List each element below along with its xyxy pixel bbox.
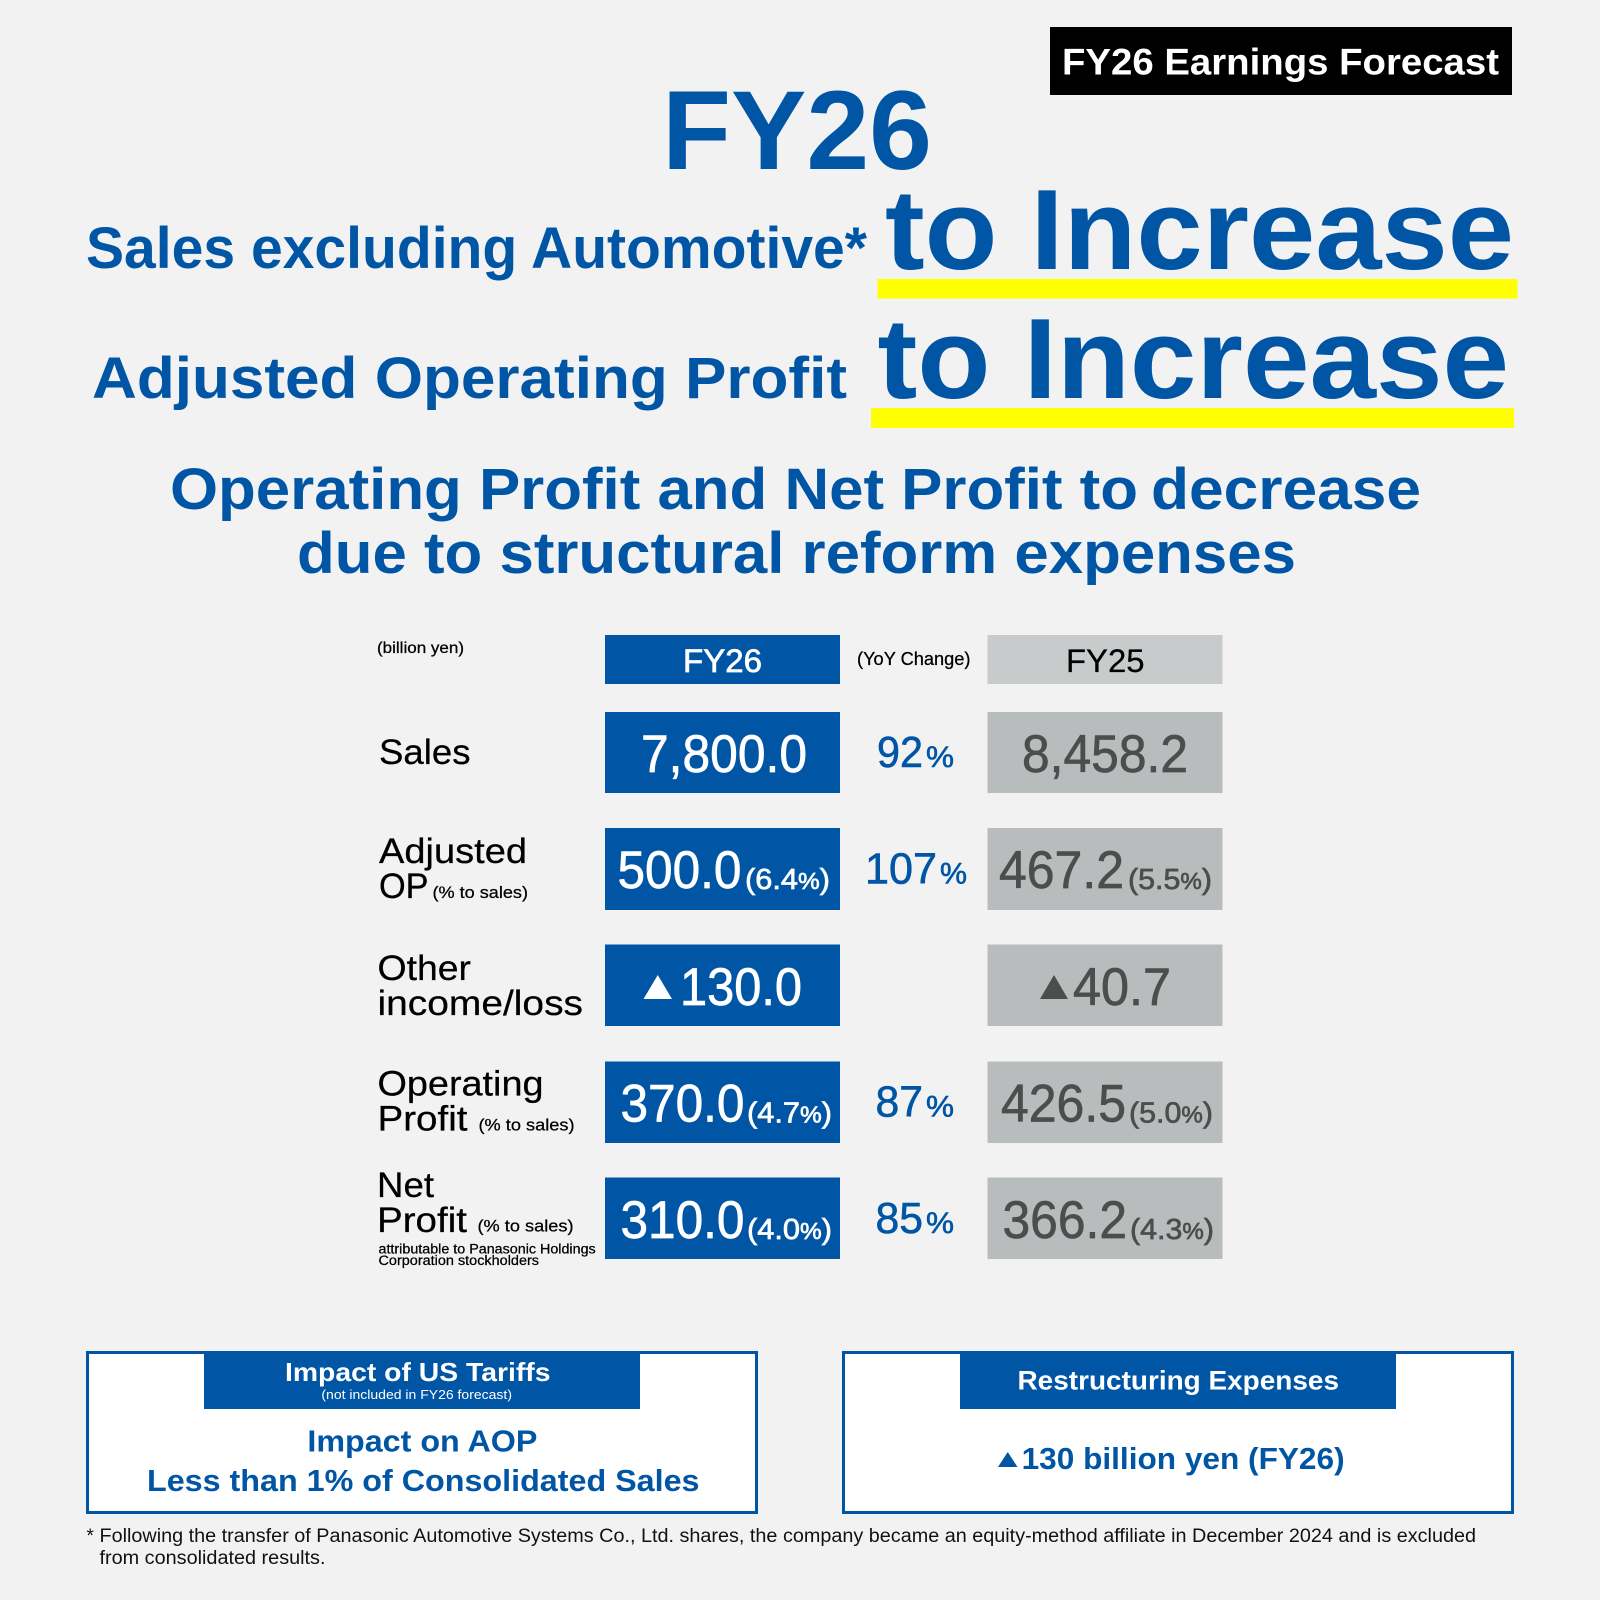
row: adjusted OP: 500.0 [618,841,742,900]
subheading: operating profit and net profit: due to structural reform expenses [297,521,1296,586]
row: other income/loss [378,944,1222,1026]
table header: (YoY Change) [857,649,970,669]
row: net profit: Net [377,1166,434,1205]
row: net profit [377,1166,1222,1268]
row: operating profit: % [926,1090,954,1124]
footnote: * [86,1526,94,1547]
row: other income/loss: Other [378,949,471,988]
row: adjusted OP: 107 [865,844,937,894]
row: sales [379,712,1222,793]
headline: sales excluding automotive to increase [86,167,1518,298]
panel: impact of US tariffs: Less than 1% of Consolidated Sales [147,1463,700,1498]
row: net profit: Corporation stockholders [378,1253,539,1268]
badge: FY26 Earnings Forecast [1050,27,1512,95]
table: earnings forecast [377,635,1222,1268]
row: other income/loss: 40.7 [1073,958,1171,1017]
footnote [86,1526,1476,1569]
subheading: operating profit and net profit: decrease [1151,457,1421,522]
row: net profit: 310.0 [620,1191,744,1250]
row: operating profit: (5.0%) [1129,1098,1213,1130]
row: net profit: (4.0%) [747,1214,832,1246]
row: operating profit: 370.0 [620,1074,744,1134]
row: sales: 92 [877,728,923,777]
row: adjusted OP: (5.5%) [1128,864,1212,896]
row: net profit: 366.2 [1002,1191,1127,1250]
table header: FY25 [1066,643,1144,679]
row: sales: % [926,741,954,774]
title: FY26: FY26 [662,68,932,193]
table header: FY26 [683,643,762,679]
headline: adjusted operating profit to increase: Adjusted Operating Profit [92,346,847,411]
row: operating profit: (4.7%) [747,1098,832,1130]
row: operating profit: Profit [378,1100,468,1138]
footnote: Following the transfer of Panasonic Automotive Systems Co., Ltd. shares, the company became an equity-method affiliate in December 2024 and is excluded [100,1526,1476,1547]
row: operating profit: 426.5 [1001,1074,1126,1134]
row: net profit: Profit [377,1201,467,1240]
row: operating profit [378,1062,1222,1143]
headline: adjusted operating profit to increase: to Increase [878,296,1509,423]
panel: impact of US tariffs: Impact of US Tariffs [285,1357,550,1387]
headline: sales excluding automotive to increase: Sales excluding Automotive* [86,216,867,281]
row: operating profit: (% to sales) [478,1116,574,1134]
panel: impact of US tariffs: (not included in FY26 forecast) [321,1387,512,1402]
panel: restructuring expenses: 130 billion yen (FY26) [1022,1441,1345,1476]
table header [377,635,1222,684]
row: sales: 8,458.2 [1022,725,1188,784]
panel: impact of US tariffs: Impact on AOP [307,1424,537,1458]
row: adjusted OP: (% to sales) [432,883,528,902]
row: net profit: % [926,1207,954,1240]
row: adjusted OP: OP [379,867,428,906]
row: adjusted OP: 467.2 [999,841,1124,900]
row: operating profit: Operating [378,1065,544,1104]
footnote: from consolidated results. [100,1548,326,1569]
headline: sales excluding automotive to increase: to Increase [885,167,1514,294]
table header: (billion yen) [377,640,464,657]
row: other income/loss: income/loss [378,984,583,1023]
row: net profit: attributable to Panasonic Holdings [378,1241,596,1256]
row: other income/loss: 130.0 [680,958,802,1017]
row: adjusted OP: (6.4%) [745,864,830,896]
panel: impact of US tariffs [88,1352,756,1512]
subheading: operating profit and net profit [170,457,1421,586]
badge: FY26 Earnings Forecast: FY26 Earnings Forecast [1062,42,1499,82]
row: adjusted OP: % [940,858,967,890]
row: operating profit: 87 [876,1078,923,1126]
row: adjusted OP [379,828,1222,910]
panel: restructuring expenses [844,1352,1512,1512]
row: sales: 7,800.0 [641,725,807,784]
row: adjusted OP: Adjusted [379,832,527,871]
row: net profit: 85 [876,1194,923,1243]
panel: restructuring expenses: Restructuring Expenses [1018,1366,1339,1396]
headline: adjusted operating profit to increase [92,296,1514,428]
row: net profit: (4.3%) [1130,1214,1214,1246]
row: sales: Sales [379,733,470,772]
row: net profit: (% to sales) [478,1216,574,1236]
subheading: operating profit and net profit: Operating Profit and Net Profit to [170,457,1138,522]
